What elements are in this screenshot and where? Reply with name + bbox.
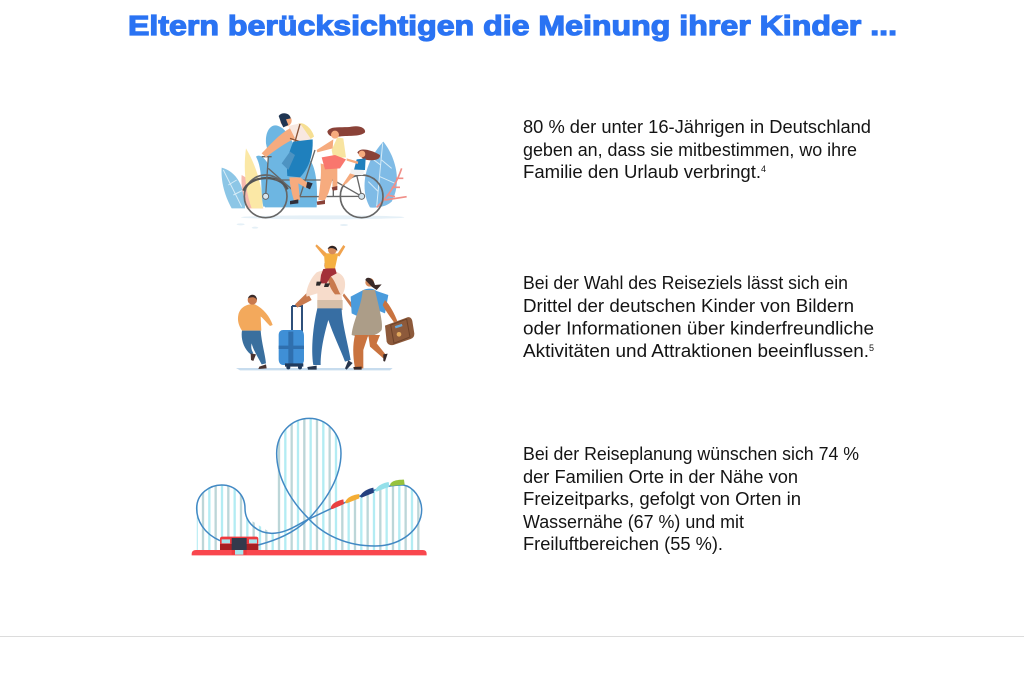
text block: Wahl des Reiseziels: oder Informationen über kinderfreundliche [523, 318, 874, 338]
text block: Wahl des Reiseziels [523, 273, 874, 361]
text block: Wahl des Reiseziels: Aktivitäten und Attraktionen beeinflussen. [523, 341, 869, 361]
text block: Mitbestimmung: geben an, dass sie mitbestimmen, wo ihre [523, 140, 857, 160]
text block: Reiseplanung: Bei der Reiseplanung wünschen sich 74 % [523, 444, 859, 464]
text block: Reiseplanung: Freizeitparks, gefolgt von Orten in [523, 489, 801, 509]
text block: Reiseplanung [523, 444, 859, 554]
text block: Mitbestimmung: 4 [761, 164, 766, 174]
text block: Mitbestimmung [523, 117, 871, 182]
illustration: roller coaster [192, 417, 427, 555]
illustration: family travelling with luggage [236, 244, 414, 370]
illustration: family on tandem bicycle [222, 113, 407, 229]
text block: Wahl des Reiseziels: 5 [869, 343, 874, 353]
text block: Mitbestimmung: Familie den Urlaub verbringt. [523, 162, 761, 182]
text block: Wahl des Reiseziels: Drittel der deutschen Kinder von Bildern [523, 296, 854, 316]
text block: Wahl des Reiseziels: Bei der Wahl des Reiseziels lässt sich ein [523, 273, 848, 293]
text block: Reiseplanung: Freiluftbereichen (55 %). [523, 534, 723, 554]
text block: Mitbestimmung: 80 % der unter 16-Jährigen in Deutschland [523, 117, 871, 137]
text block: Reiseplanung: der Familien Orte in der Nähe von [523, 467, 798, 487]
text block: Reiseplanung: Wassernähe (67 %) und mit [523, 512, 744, 532]
title: Eltern berücksichtigen die Meinung ihrer Kinder ... [128, 10, 897, 41]
